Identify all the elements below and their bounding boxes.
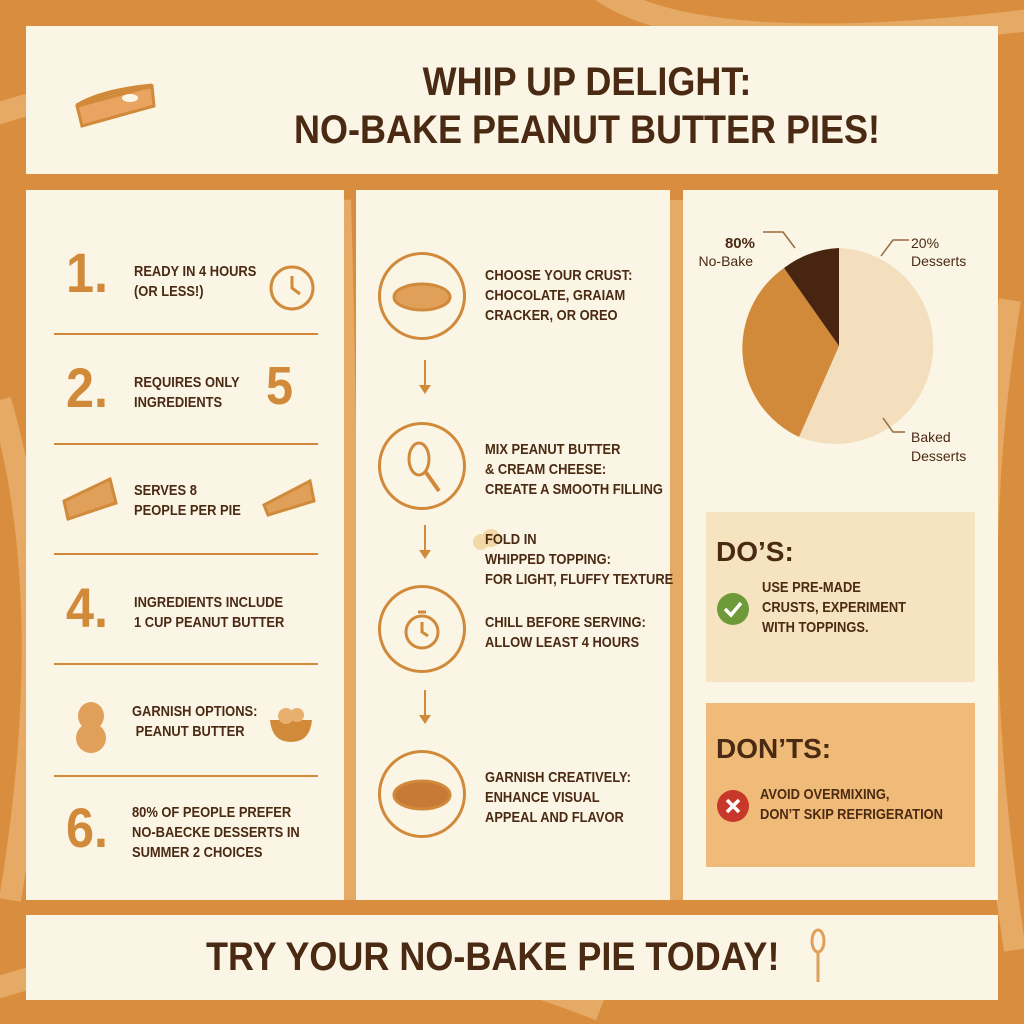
- step 4: CHILL BEFORE SERVING:: [485, 614, 646, 631]
- fact 6: SUMMER 2 CHOICES: [132, 844, 262, 861]
- pie chart: [699, 231, 966, 464]
- pie chart: Desserts: [911, 253, 966, 269]
- fact 1: 1.: [66, 241, 108, 304]
- fact 1: READY IN 4 HOURS: [134, 263, 256, 280]
- step 2: MIX PEANUT BUTTER: [485, 441, 620, 458]
- pie chart: 80%: [725, 235, 755, 252]
- fact 2: 5: [266, 356, 293, 416]
- icon: cross: [717, 790, 749, 822]
- fact 1: [66, 241, 314, 310]
- fact 4: INGREDIENTS INCLUDE: [134, 594, 283, 611]
- fact 6: 80% OF PEOPLE PREFER: [132, 804, 291, 821]
- fact 2: 2.: [66, 356, 108, 419]
- don'ts box: DON’T SKIP REFRIGERATION: [760, 806, 943, 823]
- fact 2: INGREDIENTS: [134, 394, 222, 411]
- step 5: APPEAL AND FLAVOR: [485, 809, 624, 826]
- step 1: CHOOSE YOUR CRUST:: [485, 267, 632, 284]
- fact 3: PEOPLE PER PIE: [134, 502, 241, 519]
- cta text: TRY YOUR NO-BAKE PIE TODAY!: [206, 935, 779, 979]
- pie chart: 20%: [911, 235, 939, 251]
- do's box: WITH TOPPINGS.: [762, 619, 869, 636]
- fact 5: PEANUT BUTTER: [136, 723, 245, 740]
- fact 1: (OR LESS!): [134, 283, 204, 300]
- step 2: CREATE A SMOOTH FILLING: [485, 481, 663, 498]
- step 3: FOLD IN: [485, 531, 537, 548]
- panel: facts: [26, 190, 344, 900]
- arrow: [424, 360, 426, 392]
- step 1: CHOCOLATE, GRAIAM: [485, 287, 625, 304]
- do's box: DO’S:: [716, 536, 794, 567]
- arrow: [424, 525, 426, 557]
- fact 4: 4.: [66, 576, 108, 639]
- title: [294, 60, 880, 152]
- do's box: USE PRE-MADE: [762, 579, 861, 596]
- fact 4: [66, 576, 284, 639]
- fact 2: REQUIRES ONLY: [134, 374, 240, 391]
- fact 3: [62, 476, 316, 521]
- step 1: [378, 252, 632, 340]
- step 2: [378, 422, 663, 510]
- fact 5: [76, 702, 312, 753]
- icon: bowl: [270, 708, 312, 742]
- step 2: & CREAM CHEESE:: [485, 461, 606, 478]
- pie chart: Desserts: [911, 448, 966, 464]
- panel: chart and tips: [683, 190, 998, 900]
- don'ts box: DON’TS:: [716, 733, 831, 764]
- icon: check: [717, 593, 749, 625]
- fact 4: 1 CUP PEANUT BUTTER: [134, 614, 284, 631]
- icon: peanut: [76, 702, 106, 753]
- do's box: [706, 512, 975, 682]
- step 3: [473, 529, 673, 588]
- icon: pie: [62, 476, 118, 521]
- icon: clock: [270, 266, 314, 310]
- icon: pie slice: [75, 84, 156, 128]
- panel: steps: [356, 190, 670, 900]
- fact 6: [66, 796, 300, 861]
- step 3: FOR LIGHT, FLUFFY TEXTURE: [485, 571, 673, 588]
- step 4: [378, 585, 646, 673]
- step 5: [378, 750, 631, 838]
- pie chart: No-Bake: [699, 253, 753, 269]
- arrow: [424, 690, 426, 722]
- step 5: GARNISH CREATIVELY:: [485, 769, 631, 786]
- fact 6: NO-BAECKE DESSERTS IN: [132, 824, 300, 841]
- icon: pie slice: [262, 478, 316, 517]
- fact 3: SERVES 8: [134, 482, 197, 499]
- icon: spoon: [810, 928, 826, 982]
- don'ts box: AVOID OVERMIXING,: [760, 786, 889, 803]
- step 4: ALLOW LEAST 4 HOURS: [485, 634, 639, 651]
- pie chart: Baked: [911, 429, 951, 445]
- don'ts box: [706, 703, 975, 867]
- step 5: ENHANCE VISUAL: [485, 789, 600, 806]
- fact 6: 6.: [66, 796, 108, 859]
- title: NO-BAKE PEANUT BUTTER PIES!: [294, 108, 880, 152]
- title: WHIP UP DELIGHT:: [423, 60, 751, 104]
- do's box: CRUSTS, EXPERIMENT: [762, 599, 906, 616]
- step 3: WHIPPED TOPPING:: [485, 551, 611, 568]
- step 1: CRACKER, OR OREO: [485, 307, 618, 324]
- bottom banner: [26, 915, 998, 1000]
- fact 2: [66, 356, 293, 419]
- fact 5: GARNISH OPTIONS:: [132, 703, 257, 720]
- title panel: [26, 26, 998, 174]
